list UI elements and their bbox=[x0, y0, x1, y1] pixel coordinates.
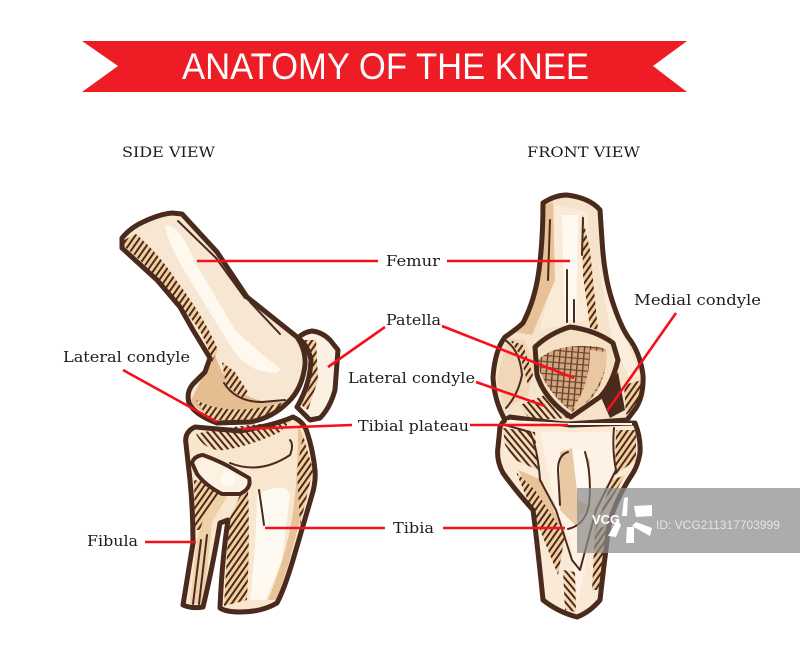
illustration: side view patella bbox=[297, 331, 338, 420]
label: Tibial plateau: Tibial plateau bbox=[358, 417, 469, 435]
illustration: side view tibia and fibula bbox=[183, 417, 315, 612]
heading: front view: FRONT VIEW bbox=[527, 145, 641, 161]
label: Medial condyle: Medial condyle bbox=[634, 291, 761, 309]
illustration: side view femur bbox=[122, 213, 305, 423]
heading: side view: SIDE VIEW bbox=[122, 145, 216, 161]
leader lines bbox=[123, 261, 676, 542]
label: Lateral condyle, front view: Lateral condyle bbox=[348, 369, 475, 387]
label: Femur: Femur bbox=[386, 252, 441, 270]
label: Lateral condyle, side view: Lateral condyle bbox=[63, 348, 190, 366]
illustration: front view femur bbox=[493, 195, 643, 424]
label: Fibula: Fibula bbox=[87, 532, 138, 550]
front view patella bbox=[535, 327, 618, 417]
label: Patella: Patella bbox=[386, 311, 441, 329]
watermark: ID: VCG211317703999 bbox=[656, 518, 780, 532]
side view fibula head bbox=[192, 455, 250, 494]
title banner: ANATOMY OF THE KNEE bbox=[182, 46, 589, 87]
watermark bbox=[577, 488, 800, 553]
title banner bbox=[82, 41, 687, 92]
label: Tibia: Tibia bbox=[393, 519, 434, 537]
watermark: VCG bbox=[592, 512, 620, 527]
illustration: front view tibia bbox=[498, 417, 640, 617]
